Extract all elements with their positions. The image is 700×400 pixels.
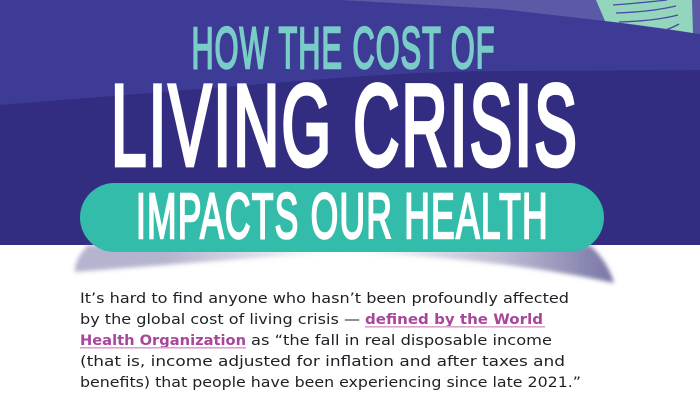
intro paragraph bbox=[80, 290, 581, 391]
intro paragraph: Health Organization bbox=[80, 332, 246, 349]
banner pill bbox=[80, 180, 604, 252]
intro paragraph: by the global cost of living crisis — bbox=[80, 311, 360, 328]
intro paragraph: defined by the World bbox=[365, 311, 543, 328]
intro paragraph: as “the fall in real disposable income bbox=[251, 332, 552, 349]
banner shadow bbox=[75, 245, 614, 283]
icon: paper note bbox=[596, 0, 693, 33]
intro paragraph: benefits) that people have been experiencing since late 2021.” bbox=[80, 374, 581, 391]
header background bbox=[0, 0, 700, 245]
intro paragraph: It’s hard to find anyone who hasn’t been profoundly affected bbox=[80, 290, 569, 307]
intro paragraph: (that is, income adjusted for inflation and after taxes and bbox=[80, 353, 565, 370]
